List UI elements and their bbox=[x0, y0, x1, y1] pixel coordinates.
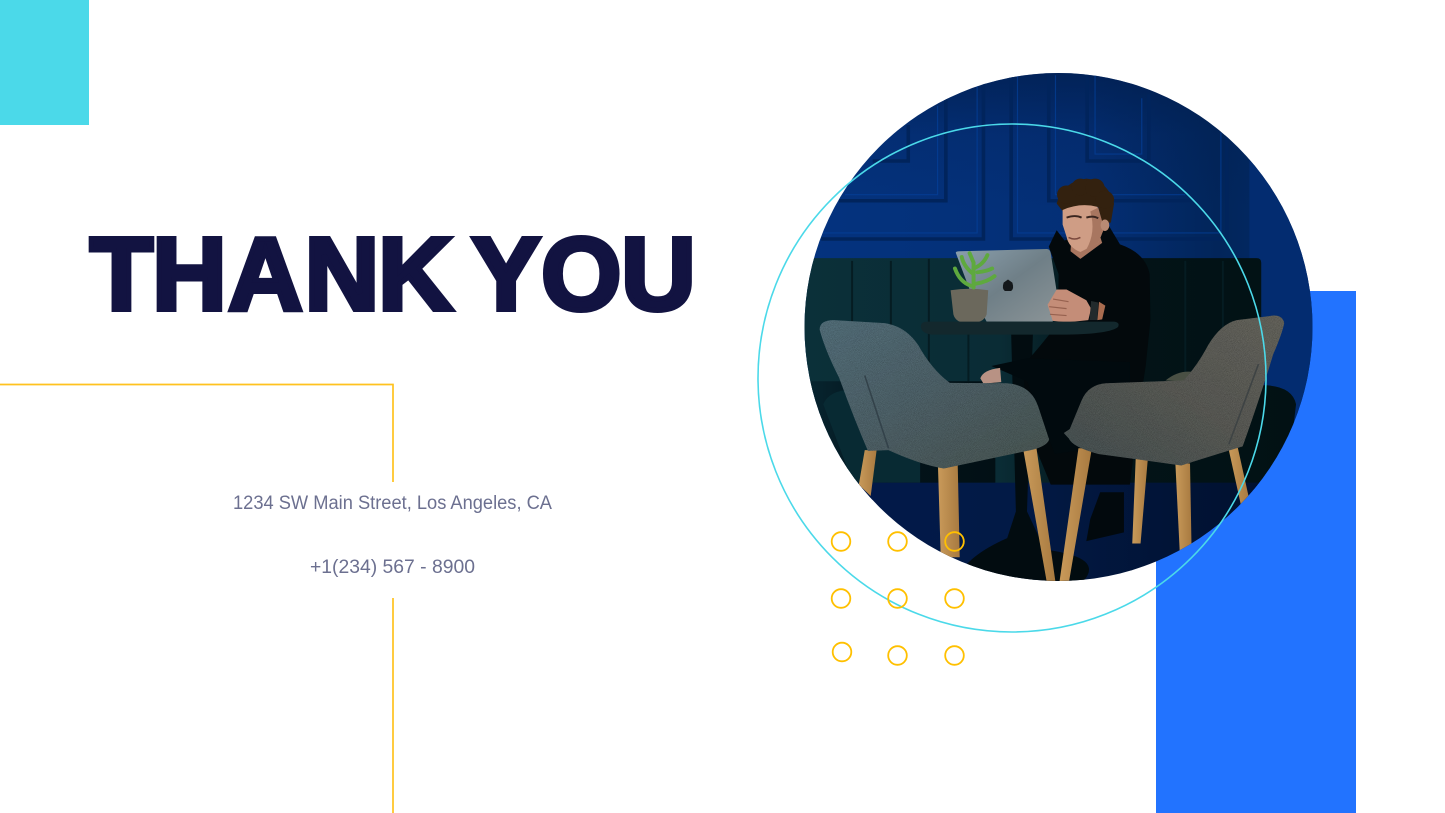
left grey armchair bbox=[820, 320, 1049, 469]
title: THANK YOU bbox=[90, 216, 696, 332]
plant in pot bbox=[951, 253, 995, 323]
address text: 1234 SW Main Street, Los Angeles, CA bbox=[233, 493, 552, 514]
curly hair bbox=[1057, 179, 1114, 223]
dark floor bbox=[858, 482, 1260, 581]
cyan outline circle bbox=[758, 124, 1266, 632]
round table top bbox=[921, 322, 1119, 335]
shoe bbox=[1086, 492, 1124, 541]
yellow dot grid bbox=[832, 532, 964, 665]
photo: man with laptop in a circle bbox=[790, 60, 1324, 590]
yellow frame line bbox=[0, 384, 393, 813]
wooden chair legs bbox=[859, 446, 1249, 582]
man: hoodie and trousers bbox=[980, 179, 1150, 541]
ear bbox=[1101, 220, 1109, 231]
face bbox=[1063, 205, 1104, 252]
decorative cyan square bbox=[0, 0, 89, 125]
blue panelled wall bbox=[790, 60, 1324, 500]
neck bbox=[1071, 237, 1102, 259]
blue rectangle bbox=[1156, 291, 1356, 813]
knee bbox=[980, 368, 1001, 384]
table pedestal bbox=[956, 333, 1089, 582]
teal bench bbox=[801, 258, 1296, 486]
laptop bbox=[956, 249, 1057, 322]
hand and watch bbox=[1048, 290, 1105, 322]
right grey armchair bbox=[1064, 316, 1284, 465]
phone text: +1(234) 567 - 8900 bbox=[310, 557, 475, 578]
